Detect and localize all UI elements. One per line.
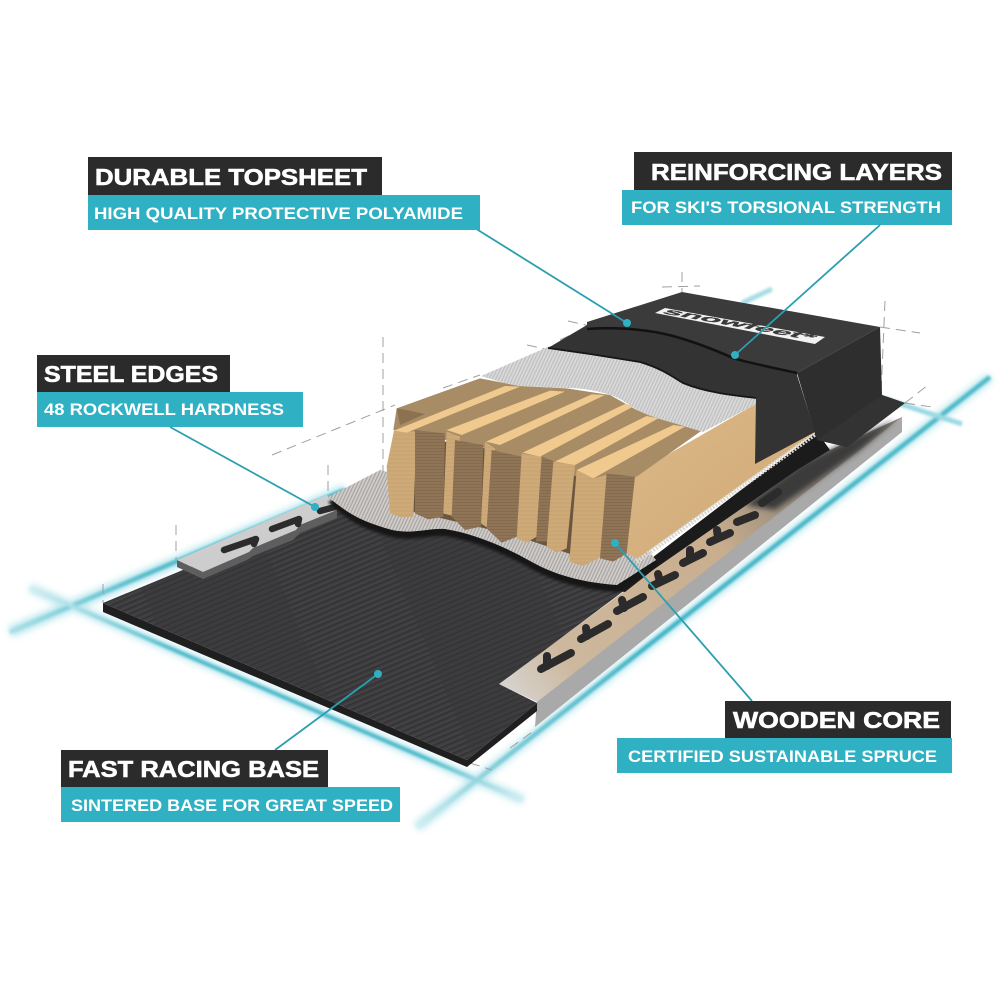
label: fast racing base: FAST RACING BASE xyxy=(68,756,319,782)
block 2 xyxy=(415,430,445,519)
ski guide lines xyxy=(10,289,990,827)
block gaps backing xyxy=(397,433,633,558)
block 7 xyxy=(517,453,542,543)
snowfeet logo xyxy=(655,307,825,344)
topsheet upper face xyxy=(587,292,880,373)
light strip tops xyxy=(394,386,685,478)
lower fibre mesh layer xyxy=(328,470,656,592)
label: durable topsheet xyxy=(88,157,480,230)
wooden core xyxy=(387,378,817,566)
upper fibre mesh layer xyxy=(481,346,758,432)
steel edge: dark channel and front notches xyxy=(541,432,830,669)
reinforcing layer xyxy=(548,320,815,464)
block 6 xyxy=(487,450,522,543)
label: fast racing base xyxy=(61,750,400,822)
leader: steel edges xyxy=(170,427,319,511)
wood side face xyxy=(627,403,817,558)
label: reinforcing layers: FOR SKI'S TORSIONAL STRENGTH xyxy=(631,199,941,217)
wood top face xyxy=(393,378,702,482)
label: steel edges: 48 ROCKWELL HARDNESS xyxy=(44,401,284,419)
label: durable topsheet: DURABLE TOPSHEET xyxy=(95,164,367,190)
block 1 xyxy=(387,431,417,517)
steel edge: front side and top strip xyxy=(499,417,902,727)
label: wooden core: WOODEN CORE xyxy=(733,707,940,733)
leader: topsheet xyxy=(470,225,631,327)
topsheet foot xyxy=(817,395,905,447)
topsheet side face xyxy=(797,327,905,447)
dashed construction lines xyxy=(103,272,932,770)
block 3 xyxy=(443,432,460,517)
block 4 xyxy=(452,440,483,530)
label: fast racing base: SINTERED BASE FOR GREAT SPEED xyxy=(71,797,393,815)
snowfeet logo: snowfeet* xyxy=(658,307,822,342)
fast racing base sheet xyxy=(103,505,645,767)
leader: reinforcing layers xyxy=(731,225,880,359)
label: reinforcing layers: REINFORCING LAYERS xyxy=(651,159,942,185)
label: wooden core: CERTIFIED SUSTAINABLE SPRUCE xyxy=(628,748,937,766)
label: steel edges: STEEL EDGES xyxy=(44,361,218,387)
block 11 xyxy=(600,473,635,562)
mesh edge below side face xyxy=(637,434,815,562)
label: durable topsheet: HIGH QUALITY PROTECTIVE POLYAMIDE xyxy=(94,205,463,223)
leader: wooden core xyxy=(611,539,752,701)
label: reinforcing layers xyxy=(622,152,952,225)
durable topsheet xyxy=(587,292,905,447)
label: wooden core xyxy=(617,701,952,773)
label: steel edges xyxy=(37,355,303,427)
leader: racing base xyxy=(275,670,382,750)
block 5 xyxy=(481,442,495,528)
steel edge: back strip xyxy=(177,495,337,579)
block 9 xyxy=(547,462,575,553)
block 8 xyxy=(536,457,555,542)
block 10 xyxy=(569,470,607,566)
